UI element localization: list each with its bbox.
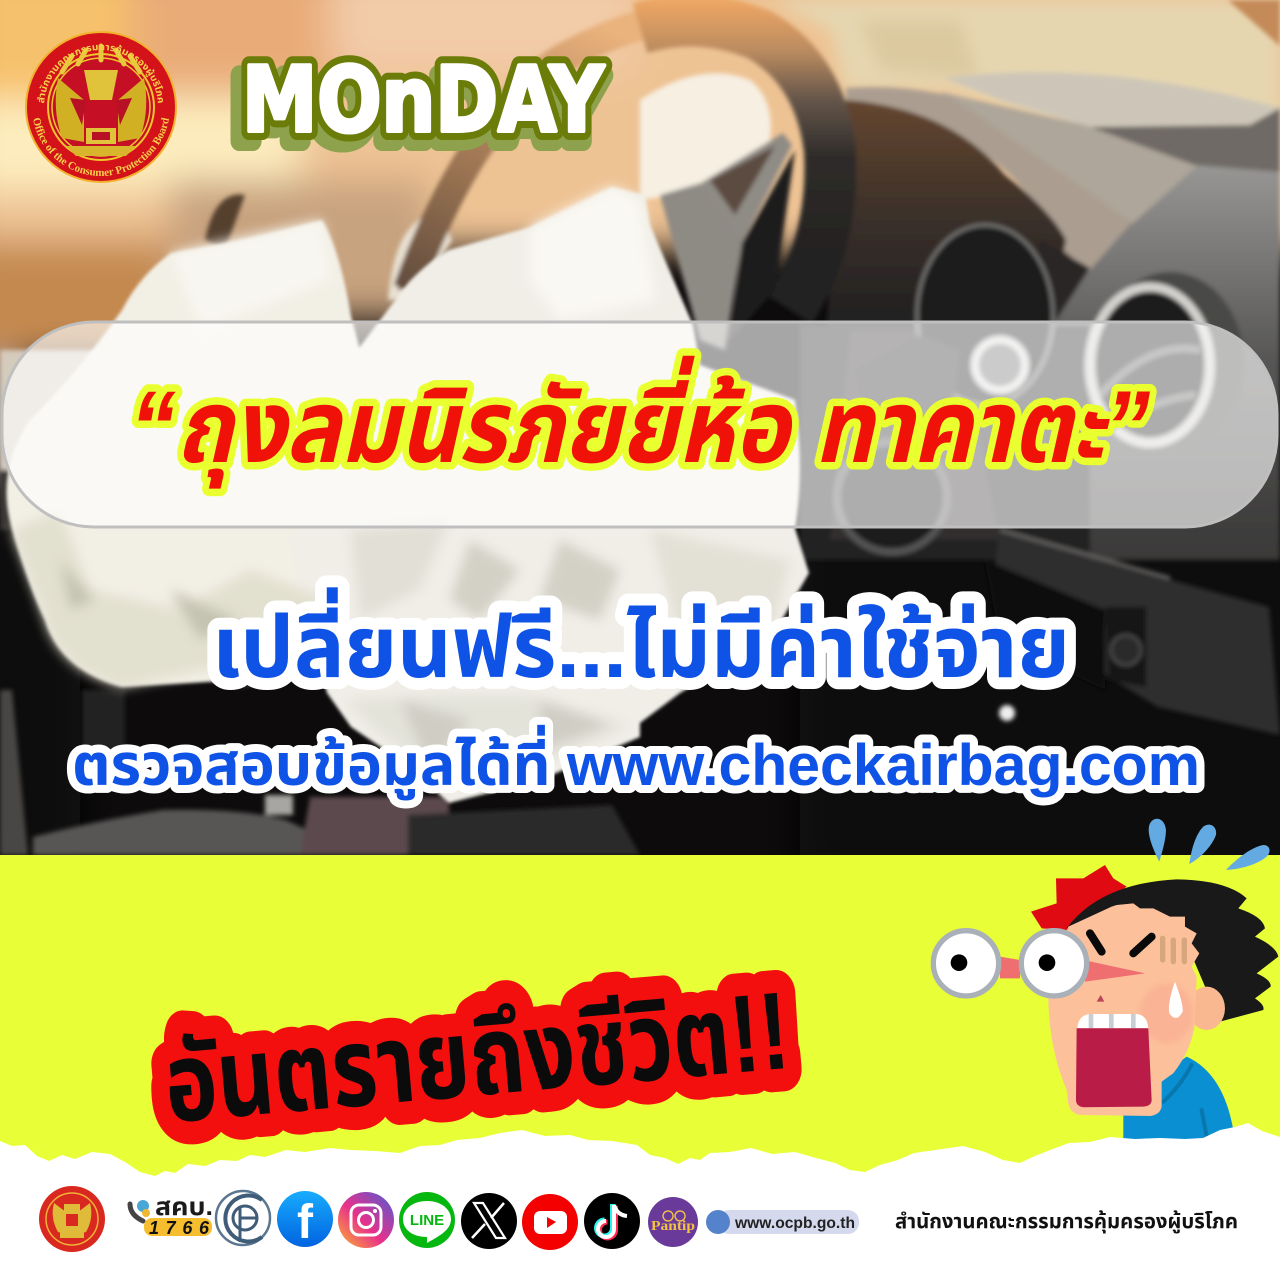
airbag through wheel [640,73,771,200]
mouth [1077,1014,1148,1028]
pantip icon [648,1197,698,1247]
sweat on cheek [1169,982,1183,1018]
dash top panel [940,92,1197,224]
left dash vents and tan panel [205,195,245,250]
youtube icon [522,1194,578,1250]
pantip icon: Pantip [651,1219,695,1234]
tiktok icon [584,1193,640,1249]
centre airbag [290,187,809,803]
title: airbag brand Takata: “ถุงลมนิรภัยยี่ห้อ ทาคาตะ” [130,356,1150,489]
white footer with torn edge [0,1123,1280,1280]
hotline 1766: 1766 [149,1218,210,1238]
air vent [1135,270,1242,340]
seal logo top [25,31,177,183]
x icon [461,1193,517,1249]
yellow panel [0,855,1280,1185]
instrument hood [846,87,1132,272]
seat and console bottom left [82,690,125,750]
facebook icon: f [297,1196,314,1249]
hotline 1766 [130,1193,213,1238]
hotline 1766: สคบ. [155,1193,213,1221]
left airbag [6,220,370,687]
sub-headline: check website: ตรวจสอบข้อมูลได้ที่ www.checkairbag.com [72,724,1200,801]
steering wheel rim [392,10,644,288]
illustration: shocked man with popping eyes [933,819,1278,1143]
forehead lines [1163,938,1184,962]
instagram icon [338,1192,394,1248]
footer logo row [39,1186,859,1252]
heading: MONDAY: MOnDAY [242,48,606,153]
face [1048,903,1199,1116]
centre console [995,532,1280,735]
heading: MONDAY: MOnDAY [232,58,606,163]
round vent lower [837,442,947,552]
ear [1188,987,1225,1030]
warning: danger to life: อันตรายถึงชีวิต!! [160,969,794,1146]
website pill: www.ocpb.go.th [734,1215,855,1232]
line icon: LINE [410,1212,444,1229]
gauge [917,225,1053,405]
seal logo top: สำนักงานคณะกรรมการคุ้มครองผู้บริโภค [36,44,164,103]
hair [1067,879,1278,1022]
headline: free replacement: เปลี่ยนฟรี...ไม่มีค่าใช้จ่าย [212,587,1070,696]
nose [1000,957,1145,982]
shirt [1123,1057,1233,1143]
airbag folds [12,510,330,687]
stalk [916,336,954,397]
website pill [706,1210,859,1234]
sweat drops [1149,819,1270,870]
angry brows [1090,933,1152,953]
seal logo footer [39,1186,105,1252]
lower cabin under pill [800,325,1090,560]
glass title pill [2,322,1277,527]
blush [1140,983,1193,1043]
spoke [660,183,742,350]
background photo: deployed airbags in car [0,0,1280,880]
ocpb logo [216,1191,270,1245]
line icon [399,1192,455,1248]
windshield [782,0,1280,112]
red burst [1031,865,1127,930]
dashboard [1040,165,1280,560]
start button [975,340,1025,390]
heading: MONDAY: MOnDAY [242,48,606,153]
footer organisation name: สำนักงานคณะกรรมการคุ้มครองผู้บริโภค [895,1211,1238,1233]
seal logo top: Office of the Consumer Protection Board [34,118,169,176]
facebook icon [277,1191,333,1249]
glasses eyes [933,931,1087,996]
